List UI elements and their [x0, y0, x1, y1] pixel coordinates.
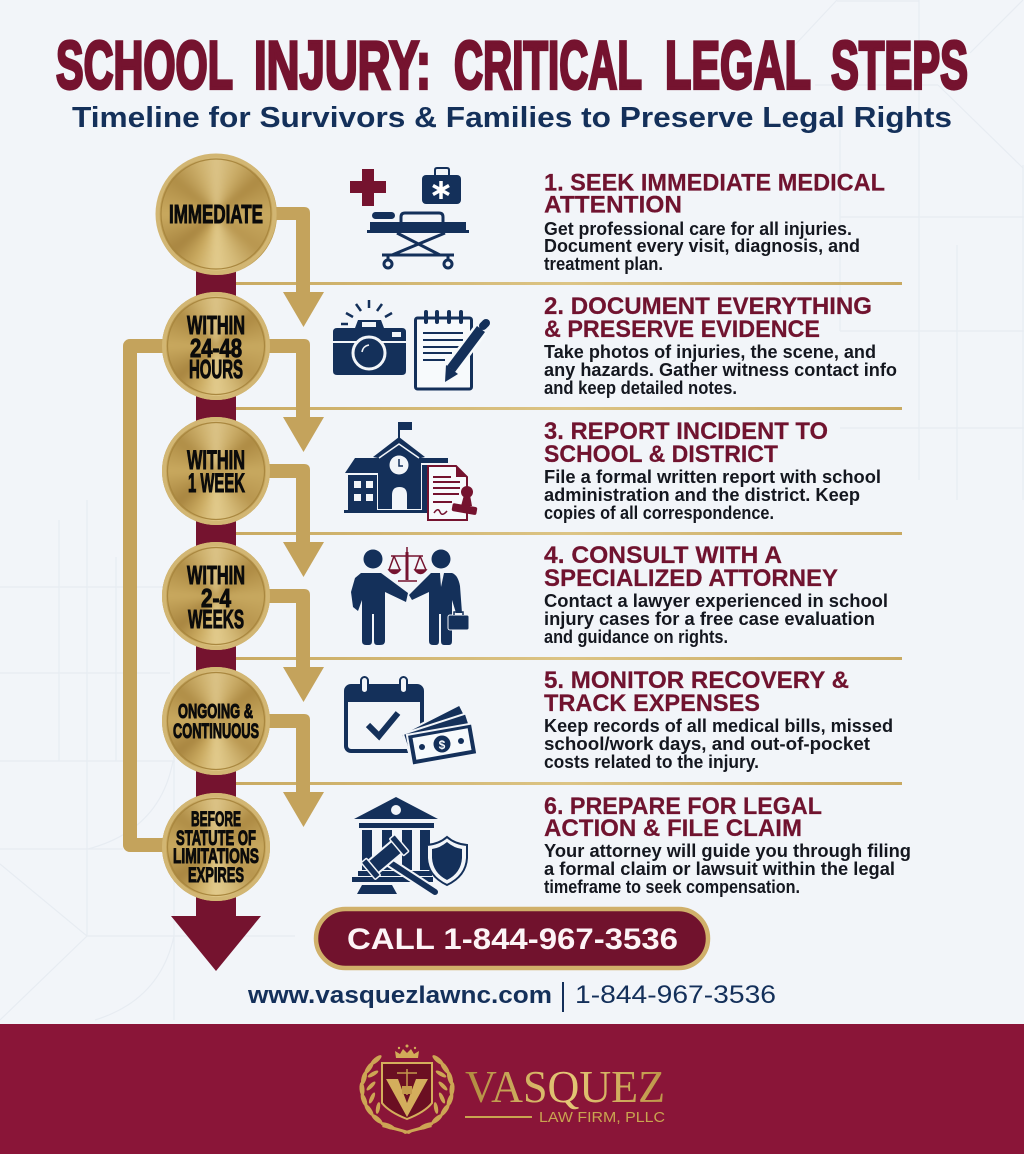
icon: school and document [344, 422, 477, 520]
medallion: within 2-4 weeks [162, 542, 270, 650]
text: step 6: Your attorney will guide you through filing [544, 841, 911, 861]
medallion: within 24-48 hours [162, 292, 270, 400]
icon: courthouse gavel and shield [352, 797, 467, 894]
heading: step 1: ATTENTION [544, 192, 682, 218]
title: SCHOOL [56, 28, 233, 104]
text: step 2: Take photos of injuries, the scene, and [544, 342, 876, 362]
text: step 2: any hazards. Gather witness contact info [544, 360, 897, 380]
medallion: within 2-4 weeks: 2-4 [201, 583, 231, 613]
text: step 1: treatment plan. [544, 254, 663, 274]
call to action button [316, 909, 708, 968]
heading: step 5: TRACK EXPENSES [544, 690, 760, 717]
text: step 5: school/work days, and out-of-pocket [544, 734, 870, 754]
heading: step 3: SCHOOL & DISTRICT [544, 441, 778, 468]
medallion: within 24-48 hours: HOURS [189, 354, 243, 384]
contact line: www.vasquezlawnc.com [247, 982, 552, 1009]
connector arrow 1 [270, 207, 324, 327]
medallion: within 24-48 hours: 24-48 [190, 333, 242, 363]
medallion: ongoing and continuous [162, 667, 270, 775]
heading: step 2: & PRESERVE EVIDENCE [544, 316, 820, 343]
medallion: within 1 week: 1 WEEK [188, 468, 245, 498]
text: step 6: a formal claim or lawsuit within the legal [544, 859, 895, 879]
heading: step 6: 6. PREPARE FOR LEGAL [544, 793, 822, 820]
title: LEGAL [665, 28, 811, 104]
logo wordmark: VASQUEZ [465, 1062, 665, 1112]
heading: step 4: 4. CONSULT WITH A [544, 542, 782, 569]
heading: step 1 [544, 170, 885, 218]
contact line: 1-844-967-3536 [575, 981, 776, 1009]
heading: step 1: 1. SEEK IMMEDIATE MEDICAL [544, 170, 885, 196]
heading: step 2 [544, 293, 872, 343]
heading: step 3: 3. REPORT INCIDENT TO [544, 418, 828, 445]
return connector [130, 346, 170, 845]
text: step 5 [544, 716, 893, 772]
heading: step 5: 5. MONITOR RECOVERY & [544, 667, 849, 694]
medallion: ongoing and continuous: ONGOING & [178, 701, 253, 723]
medallion: within 2-4 weeks: WEEKS [188, 604, 244, 634]
medallion: before statute of limitations expires: LIMITATIONS [173, 845, 259, 868]
connector arrow 2 [262, 339, 324, 452]
heading: step 4 [544, 542, 838, 592]
medallion: before statute of limitations expires [162, 793, 270, 901]
text: step 5: costs related to the injury. [544, 752, 759, 772]
text: step 6: timeframe to seek compensation. [544, 877, 800, 897]
contact line [247, 981, 776, 1012]
connector arrow 4 [262, 589, 324, 702]
medallion: within 1 week [162, 417, 270, 525]
text: step 1: Document every visit, diagnosis, and [544, 236, 860, 256]
medallion: within 24-48 hours: WITHIN [187, 310, 245, 340]
text: step 4 [544, 591, 888, 647]
connector arrow 5 [262, 714, 324, 827]
text: step 3 [544, 467, 881, 523]
icon: calendar and money: $ [439, 738, 446, 752]
subtitle: Timeline for Survivors & Families to Preserve Legal Rights [72, 102, 952, 134]
medallion: before statute of limitations expires: STATUTE OF [176, 827, 256, 850]
heading: step 6: ACTION & FILE CLAIM [544, 815, 802, 842]
icon: camera and notepad [333, 300, 486, 389]
text: step 3: copies of all correspondence. [544, 503, 774, 523]
connector arrow 3 [262, 464, 324, 577]
footer band [0, 1024, 1024, 1154]
medallion: immediate [156, 154, 276, 274]
medallion: immediate: IMMEDIATE [169, 199, 263, 229]
title: INJURY: [254, 28, 431, 104]
heading: step 5 [544, 667, 849, 717]
heading: step 2: 2. DOCUMENT EVERYTHING [544, 293, 872, 320]
text: step 3: File a formal written report with school [544, 467, 881, 487]
text: step 4: injury cases for a free case evaluation [544, 609, 875, 629]
text: step 3: administration and the district. Keep [544, 485, 860, 505]
heading: step 3 [544, 418, 828, 468]
icon: medical stretcher [350, 168, 469, 268]
icon: attorney handshake [351, 547, 469, 645]
logo crest [359, 1044, 455, 1134]
heading: step 6 [544, 793, 822, 842]
text: step 1: Get professional care for all injuries. [544, 219, 852, 239]
text: step 2: and keep detailed notes. [544, 378, 737, 398]
title: CRITICAL [454, 28, 642, 104]
timeline spine arrow [171, 260, 261, 971]
text: step 2 [544, 342, 897, 398]
title [56, 28, 968, 104]
text: step 4: and guidance on rights. [544, 627, 728, 647]
text: step 1 [544, 219, 860, 274]
medallion: before statute of limitations expires: BEFORE [191, 808, 241, 831]
icon: calendar and money [346, 677, 477, 765]
medallion: within 1 week: WITHIN [187, 445, 245, 475]
text: step 6 [544, 841, 911, 897]
medallion: before statute of limitations expires: EXPIRES [188, 864, 244, 887]
medallion: within 2-4 weeks: WITHIN [187, 560, 245, 590]
text: step 5: Keep records of all medical bills, missed [544, 716, 893, 736]
heading: step 4: SPECIALIZED ATTORNEY [544, 565, 838, 592]
text: step 4: Contact a lawyer experienced in school [544, 591, 888, 611]
logo wordmark: LAW FIRM, PLLC [539, 1109, 665, 1126]
medallion: ongoing and continuous: CONTINUOUS [173, 720, 259, 743]
call to action button: CALL 1-844-967-3536 [347, 923, 678, 956]
